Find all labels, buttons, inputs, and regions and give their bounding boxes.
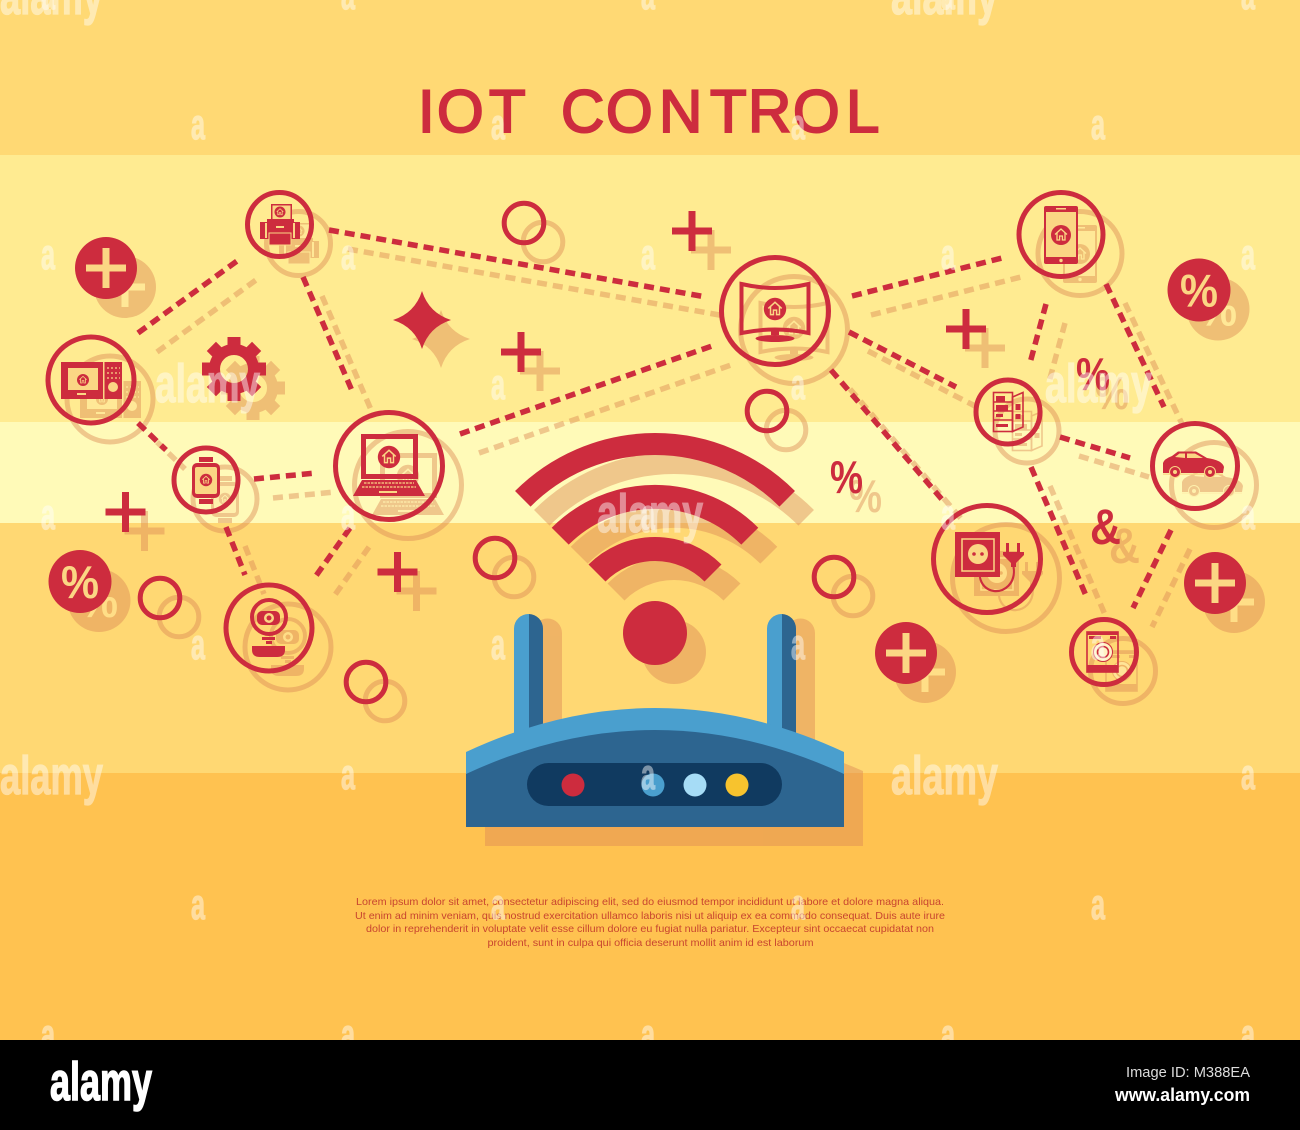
floating symbols: % bbox=[1076, 348, 1110, 400]
floating symbols: % bbox=[830, 451, 863, 503]
watermarks: a bbox=[641, 231, 656, 279]
footer bar bbox=[0, 1040, 1300, 1130]
watermarks: a bbox=[1241, 1011, 1256, 1059]
body text bbox=[355, 896, 945, 949]
title: IOT bbox=[418, 78, 526, 145]
footer image id: Image ID: M388EA bbox=[1126, 1064, 1250, 1081]
badge: plus bottom centre bbox=[875, 622, 937, 684]
icon: smart watch bbox=[174, 448, 238, 512]
watermarks: a bbox=[641, 751, 656, 799]
watermarks: alamy bbox=[597, 484, 703, 544]
watermarks: a bbox=[491, 101, 506, 149]
watermarks: a bbox=[491, 621, 506, 669]
icon: webcam bbox=[226, 585, 312, 671]
icon: car bbox=[1152, 424, 1238, 508]
router antennas bbox=[514, 614, 796, 745]
title bbox=[418, 78, 879, 145]
drop shadow layer for the network diagram bbox=[67, 212, 1265, 721]
watermarks: a bbox=[341, 1011, 356, 1059]
watermarks: a bbox=[941, 491, 956, 539]
icon: gear bbox=[202, 337, 266, 401]
watermarks: a bbox=[1241, 231, 1256, 279]
router drop shadow bbox=[485, 618, 863, 846]
badge: percent left: % bbox=[61, 556, 99, 608]
watermarks: alamy bbox=[155, 354, 260, 414]
icon: microwave bbox=[48, 337, 134, 423]
watermarks: a bbox=[191, 101, 206, 149]
watermarks: a bbox=[641, 1011, 656, 1059]
icon: laptop bbox=[336, 412, 442, 520]
floating symbols bbox=[830, 348, 1121, 555]
badge: percent left bbox=[48, 550, 112, 613]
body text: Ut enim ad minim veniam, quis nostrud exercitation ullamco laboris nisi ut aliquip ex ea commodo consequat. Duis aute irure bbox=[355, 910, 945, 922]
icon: power outlet and plug bbox=[934, 506, 1040, 612]
watermarks: a bbox=[1091, 881, 1106, 929]
icon: printer bbox=[248, 192, 312, 256]
watermarks: a bbox=[941, 231, 956, 279]
body text: Lorem ipsum dolor sit amet, consectetur adipiscing elit, sed do eiusmod tempor incididunt ut labore et dolore magna aliqua. bbox=[356, 896, 944, 908]
watermarks: a bbox=[41, 491, 56, 539]
watermarks: a bbox=[791, 621, 806, 669]
watermarks: a bbox=[491, 881, 506, 929]
router bbox=[466, 614, 844, 827]
badge: plus right bbox=[1184, 552, 1246, 614]
watermarks: alamy bbox=[891, 746, 998, 806]
dashed connections bbox=[138, 230, 1171, 608]
wifi signal bbox=[523, 444, 787, 665]
floating symbols: & bbox=[1090, 499, 1121, 555]
watermarks: alamy bbox=[1045, 354, 1152, 414]
icon: washing machine bbox=[1072, 620, 1136, 684]
watermarks: a bbox=[941, 1011, 956, 1059]
watermarks: a bbox=[191, 621, 206, 669]
watermarks: a bbox=[791, 361, 806, 409]
icon: curved tv bbox=[722, 258, 828, 364]
footer logo: alamy bbox=[50, 1052, 152, 1112]
decorative plus signs bbox=[106, 211, 986, 592]
watermarks: a bbox=[41, 1011, 56, 1059]
network diagram bbox=[48, 192, 1246, 702]
watermarks: a bbox=[41, 231, 56, 279]
watermarks: a bbox=[1091, 101, 1106, 149]
watermarks: a bbox=[1241, 751, 1256, 799]
watermarks: a bbox=[1091, 621, 1106, 669]
decorative rings bbox=[140, 203, 854, 702]
badge: percent right: % bbox=[1180, 264, 1218, 316]
watermarks: a bbox=[341, 231, 356, 279]
watermarks: a bbox=[791, 881, 806, 929]
watermarks: a bbox=[341, 491, 356, 539]
badge: percent right bbox=[1168, 258, 1230, 322]
icon: refrigerator bbox=[976, 380, 1040, 444]
watermarks: a bbox=[791, 101, 806, 149]
watermarks: a bbox=[341, 751, 356, 799]
icon: smartphone bbox=[1019, 192, 1103, 276]
watermarks: a bbox=[191, 881, 206, 929]
footer url: www.alamy.com bbox=[1114, 1085, 1250, 1105]
watermarks: a bbox=[641, 491, 656, 539]
badge: plus top left bbox=[75, 237, 137, 299]
icon: four point star bbox=[393, 291, 451, 349]
watermarks: a bbox=[1241, 491, 1256, 539]
title: CONTROL bbox=[561, 78, 879, 145]
router body bbox=[466, 708, 844, 800]
body text: dolor in reprehenderit in voluptate velit esse cillum dolore eu fugiat nulla pariatur. Excepteur sint occaecat cupidatat non bbox=[366, 923, 934, 935]
router indicator panel bbox=[527, 763, 782, 806]
watermarks: alamy bbox=[0, 746, 103, 806]
watermarks: a bbox=[491, 361, 506, 409]
body text: proident, sunt in culpa qui officia deserunt mollit anim id est laborum bbox=[488, 937, 814, 949]
